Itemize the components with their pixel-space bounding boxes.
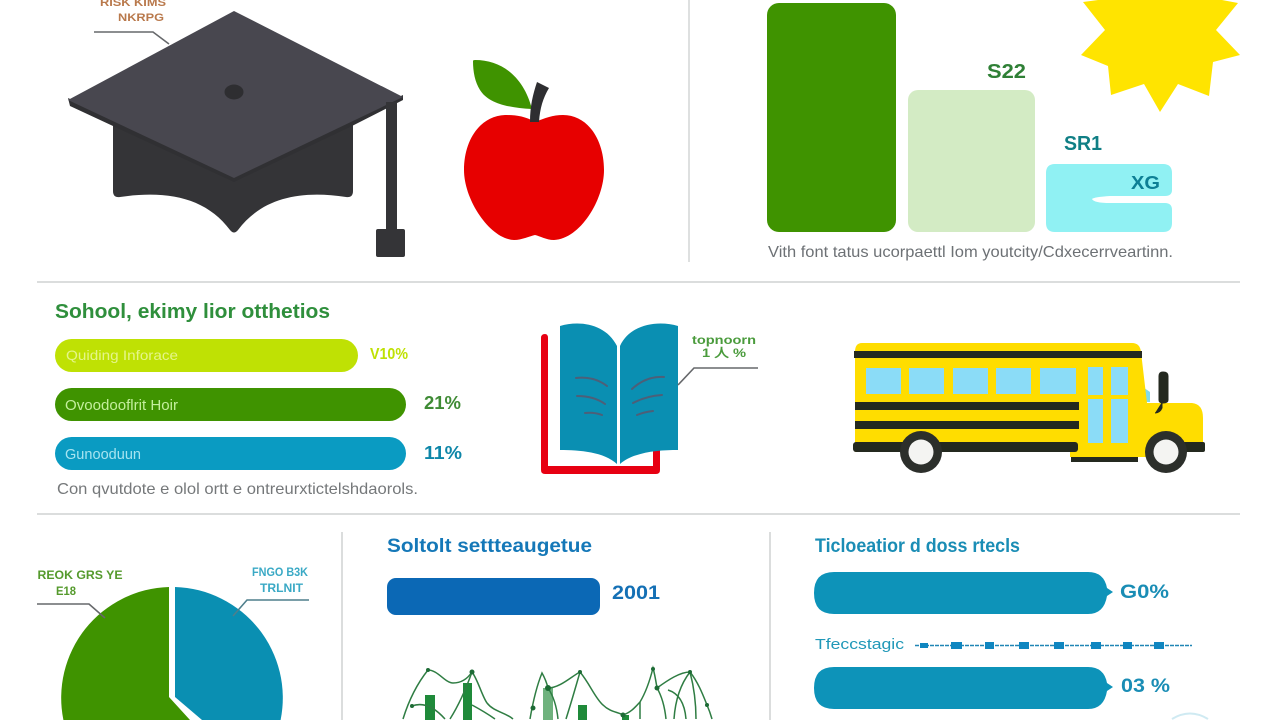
book label: topnoorn — [692, 333, 756, 347]
bar — [387, 578, 600, 615]
bar chart: three blocks — [767, 3, 1172, 232]
book label: 1 人 % — [702, 345, 746, 360]
book red cover — [541, 334, 660, 474]
icon: open book — [541, 323, 758, 474]
pie label: green: E18 — [56, 586, 77, 598]
bus rear wheel — [1145, 431, 1187, 473]
pie label: green: REOK GRS YE — [38, 570, 123, 582]
value: XG: XG — [1131, 173, 1160, 193]
panel: education bars — [814, 536, 1208, 719]
bus mirror — [1155, 372, 1168, 413]
cap board edge — [68, 95, 403, 182]
apple stem — [530, 82, 549, 122]
bar: green: Ovoodooflrit Hoir — [65, 397, 178, 414]
bar value: 2001 — [612, 583, 660, 604]
bus windows — [866, 367, 1128, 443]
icon: school bus — [853, 343, 1205, 473]
pie label: green — [38, 570, 123, 598]
bar: blue — [55, 437, 406, 470]
heading: Soltolt settteaugetue — [387, 536, 592, 557]
bus body — [855, 343, 1203, 457]
panel: school bar and line chart — [387, 536, 712, 720]
line chart — [403, 667, 712, 720]
bar: cyan — [1046, 164, 1172, 232]
bar: light green — [908, 90, 1035, 232]
pie slice: blue — [175, 587, 283, 720]
pie slice: green — [61, 587, 190, 720]
bar: blue: Gunooduun — [65, 446, 141, 463]
timeline label: Tfeccstagic — [815, 636, 905, 653]
cap leader line — [94, 32, 169, 44]
chart columns — [425, 683, 629, 720]
bar 1 — [814, 572, 1113, 614]
pie label: blue — [252, 567, 309, 595]
timeline — [915, 642, 1192, 649]
book left page — [560, 323, 617, 464]
bar 2 — [814, 667, 1113, 709]
book leader line — [678, 368, 758, 385]
icon: apple — [464, 60, 604, 240]
bar: green — [55, 388, 406, 421]
value: SR1: SR1 — [1064, 133, 1102, 155]
apple body — [464, 115, 604, 240]
cap label — [100, 0, 166, 24]
bus windshield — [1140, 385, 1150, 402]
apple leaf — [473, 60, 532, 109]
value: lime: V10% — [370, 346, 408, 363]
chart points — [410, 667, 709, 718]
bus front wheel — [900, 431, 942, 473]
book right page — [620, 323, 678, 464]
cap base — [113, 118, 353, 232]
bus stripes — [853, 351, 1205, 462]
heading: Ticloeatior d doss rtecls — [815, 536, 1020, 557]
cap board — [68, 11, 403, 178]
chart curves — [403, 668, 712, 719]
pie chart — [37, 567, 309, 720]
value: blue: 11% — [424, 443, 462, 463]
bar: lime — [55, 339, 358, 372]
pie leader: green — [37, 604, 105, 618]
bar 2 value: 03 % — [1121, 676, 1170, 697]
cap tassel — [376, 102, 405, 257]
bar: lime: Quiding Inforace — [66, 347, 178, 363]
pie label: blue: FNGO B3K — [252, 567, 309, 579]
cap label: NKRPG — [118, 12, 164, 24]
bar 1 value: G0% — [1120, 582, 1169, 603]
pie label: blue: TRLNIT — [260, 583, 303, 595]
book text lines — [576, 377, 664, 415]
value: S22: S22 — [987, 61, 1026, 83]
cap button — [224, 84, 244, 100]
panel: horizontal bars — [55, 301, 462, 498]
heading: Sohool, ekimy lior otthetios — [55, 301, 330, 323]
bar: dark green — [767, 3, 896, 232]
book label — [692, 333, 756, 360]
pie leader: blue — [233, 600, 309, 616]
caption: Con qvutdote e olol ortt e ontreurxtictelshdaorols. — [57, 481, 418, 498]
corner circle — [1172, 714, 1208, 719]
value: green: 21% — [424, 393, 461, 413]
icon: graduation cap — [68, 0, 405, 257]
chart caption: Vith font tatus ucorpaettl Iom youtcity/Cdxecerrveartinn. — [768, 244, 1173, 261]
icon: sun — [1081, 0, 1240, 112]
